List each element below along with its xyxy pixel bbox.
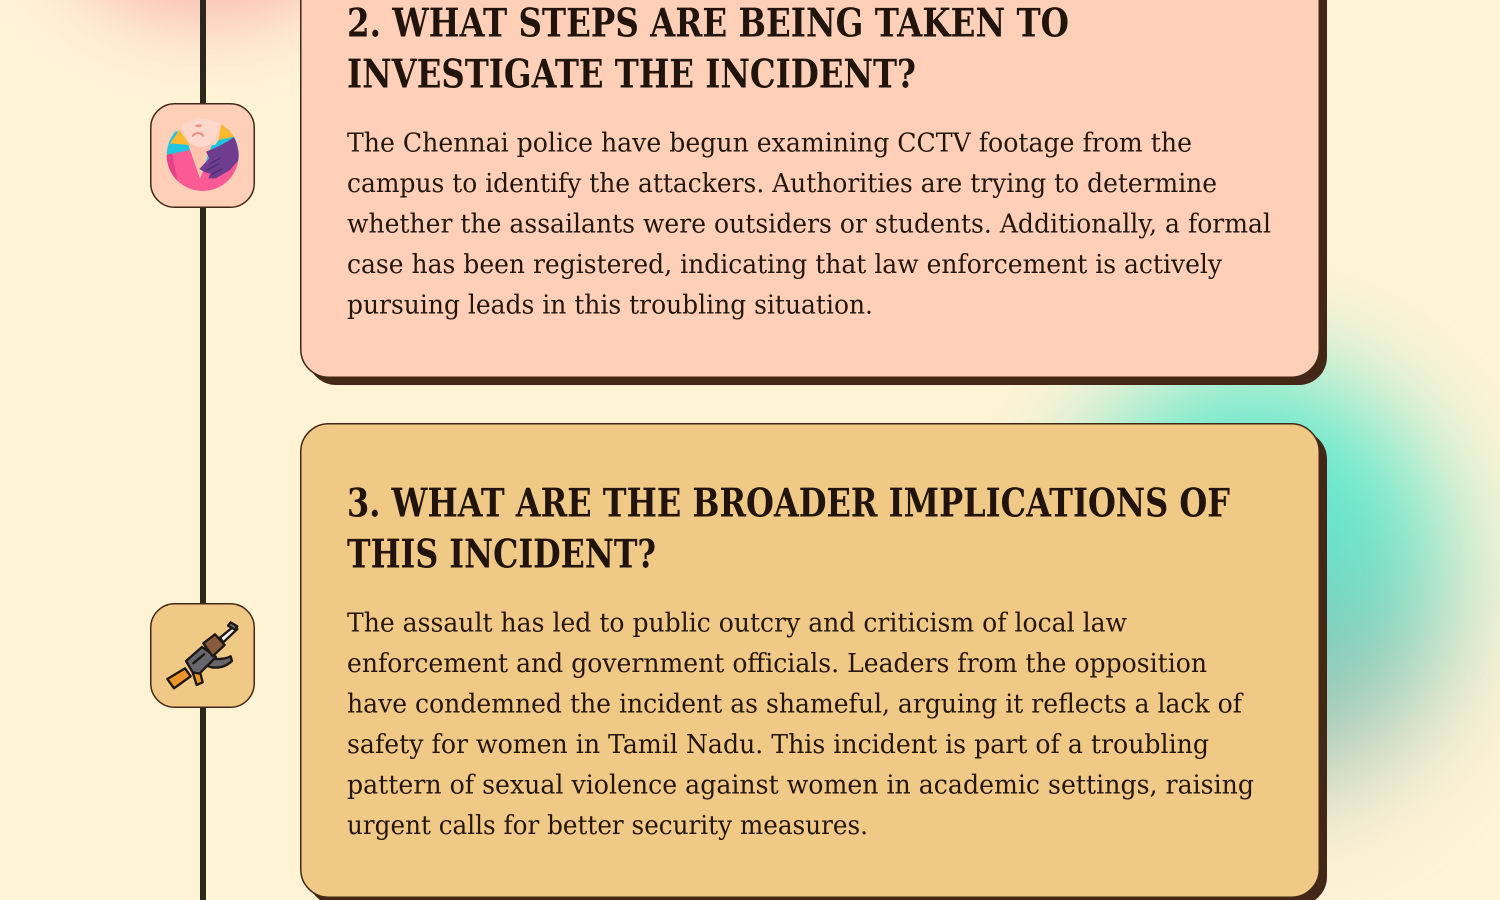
text block: question 2 answer: case has been registered, indicating that law enforcement is actively — [347, 249, 1222, 280]
text block: question 2 answer: campus to identify the attackers. Authorities are trying to determine — [347, 168, 1217, 199]
icon: woman with hand on shoulder — [151, 104, 254, 207]
background glow: teal — [1060, 365, 1450, 805]
infographic artwork — [150, 0, 1327, 900]
panel: question 3 — [301, 424, 1327, 900]
timeline line — [200, 0, 206, 900]
text block: question 3 answer: urgent calls for better security measures. — [347, 810, 868, 841]
text block: question 3 answer: pattern of sexual violence against women in academic settings, raising — [347, 770, 1254, 800]
background glow: pink — [50, 0, 370, 20]
heading: question 2: 2. WHAT STEPS ARE BEING TAKEN TO — [347, 0, 1069, 46]
text block: question 3 answer: enforcement and government officials. Leaders from the opposition — [347, 648, 1207, 679]
text block: question 3 answer: have condemned the incident as shameful, arguing it reflects a lack of — [347, 688, 1244, 720]
heading: question 3: THIS INCIDENT? — [347, 532, 656, 578]
text block: question 2 answer: The Chennai police have begun examining CCTV footage from the — [347, 128, 1192, 158]
heading: question 3: 3. WHAT ARE THE BROADER IMPLICATIONS OF — [347, 480, 1230, 526]
heading: question 2: INVESTIGATE THE INCIDENT? — [347, 52, 916, 98]
icon: rifle — [151, 604, 254, 707]
text block: question 3 answer: safety for women in Tamil Nadu. This incident is part of a troubling — [347, 729, 1209, 760]
text block: question 2 answer — [347, 128, 1271, 320]
text block: question 3 answer: The assault has led to public outcry and criticism of local law — [347, 608, 1127, 638]
panel: question 2 — [301, 0, 1327, 385]
text block: question 3 answer — [347, 608, 1254, 841]
heading: question 2 — [347, 0, 1069, 98]
text block: question 2 answer: pursuing leads in this troubling situation. — [347, 290, 873, 320]
heading: question 3 — [347, 480, 1230, 578]
text block: question 2 answer: whether the assailants were outsiders or students. Additionally, a formal — [347, 208, 1271, 240]
